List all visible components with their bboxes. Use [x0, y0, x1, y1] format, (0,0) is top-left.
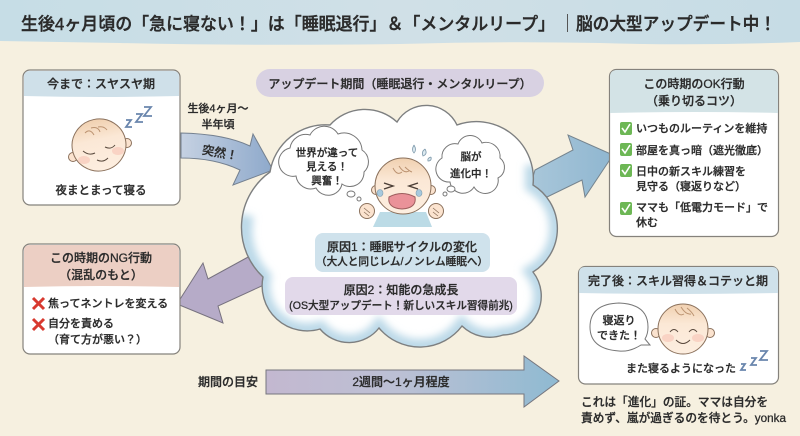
thought bubble: brain: 進化中！ — [450, 167, 492, 180]
icon: zzz — [126, 107, 152, 127]
checklist: 部屋を真っ暗（遮光徹底） — [636, 143, 768, 157]
caption: after: また寝るようになった — [626, 361, 736, 375]
checklist: ママも「低電力モード」で — [636, 200, 768, 214]
heading: NG — [50, 250, 152, 282]
arrow: duration — [266, 356, 559, 407]
thought bubble: world — [279, 126, 368, 201]
label: age: 半年頃 — [202, 117, 234, 131]
label: duration: 期間の目安 — [198, 374, 258, 389]
thought bubble: world: 興奮！ — [311, 174, 343, 187]
thought bubble: world: 見える！ — [306, 161, 348, 173]
caption: before: 夜まとまって寝る — [56, 183, 146, 197]
cause 1: （大人と同じレム/ノンレム睡眠へ） — [316, 255, 488, 268]
cause 2: 原因2：知能の急成長 — [344, 282, 458, 297]
heading: NG: この時期のNG行動 — [50, 250, 152, 265]
cause 2: (OS大型アップデート！新しいスキル習得前兆) — [289, 299, 513, 312]
title: 生後4ヶ月頃の「急に寝ない！」は「睡眠退行」＆「メンタルリープ」 — [21, 14, 555, 34]
panel header: OK — [610, 70, 778, 113]
thought bubble: brain: 脳が — [460, 150, 482, 163]
NG list — [33, 296, 168, 346]
heading pill: update period: アップデート期間（睡眠退行・メンタルリープ） — [268, 76, 532, 91]
icon: crying baby — [360, 145, 444, 227]
NG list: （育て方が悪い？） — [48, 332, 147, 346]
heading: OK: （乗り切るコツ） — [646, 94, 742, 108]
heading: OK — [643, 76, 745, 108]
checklist: 日中の新スキル練習を — [636, 164, 746, 178]
NG list: 自分を責める — [48, 316, 114, 330]
speech bubble: 寝返り — [602, 313, 636, 327]
NG list: 焦ってネントレを変える — [48, 296, 168, 310]
heading: OK: この時期のOK行動 — [643, 76, 745, 91]
title: 脳の大型アップデート中！ — [576, 14, 776, 34]
panel header: before — [24, 71, 179, 97]
panel: NG actions — [23, 244, 180, 354]
thought bubble: brain — [436, 135, 504, 196]
thought bubble: world: 世界が違って — [296, 146, 358, 159]
heading: NG: （混乱のもと） — [59, 267, 143, 282]
heading: before: 今まで：スヤスヤ期 — [47, 76, 155, 91]
checklist: 見守る（寝返りなど） — [636, 179, 746, 193]
speech bubble: できた！ — [597, 329, 641, 342]
arrow: to NG — [177, 256, 268, 323]
arrow: to OK — [530, 135, 613, 197]
cause 1: 原因1：睡眠サイクルの変化 — [327, 239, 477, 254]
arrow: sudden: 突然！ — [201, 142, 239, 163]
heading: after: 完了後：スキル習得＆コテッと期 — [588, 273, 768, 288]
label: age: 生後4ヶ月〜 — [187, 101, 249, 115]
closing note — [581, 396, 786, 425]
checklist: 休む — [636, 216, 658, 229]
panel: OK actions — [610, 70, 778, 236]
header band — [0, 0, 800, 45]
cause 1 — [315, 233, 490, 272]
checklist — [620, 121, 768, 229]
arrow: duration: 2週間〜1ヶ月程度 — [352, 374, 450, 389]
speech bubble — [590, 303, 650, 351]
panel header: after — [579, 267, 778, 294]
panel: central cloud — [241, 105, 557, 347]
closing note: これは「進化」の証。ママは自分を — [581, 396, 768, 409]
panel: before — [23, 70, 180, 205]
icon: zzz after — [741, 351, 768, 370]
icon: happy baby — [652, 304, 714, 354]
panel header: NG — [24, 245, 179, 287]
closing note: 責めず、嵐が過ぎるのを待とう。yonka — [581, 411, 786, 425]
panel: after — [578, 266, 778, 384]
arrow: sudden — [181, 133, 273, 185]
label: age — [187, 101, 249, 131]
cause 2 — [285, 277, 517, 315]
heading pill: update period — [256, 69, 544, 97]
checklist: いつものルーティンを維持 — [636, 121, 767, 135]
icon: sleeping baby — [67, 114, 132, 176]
